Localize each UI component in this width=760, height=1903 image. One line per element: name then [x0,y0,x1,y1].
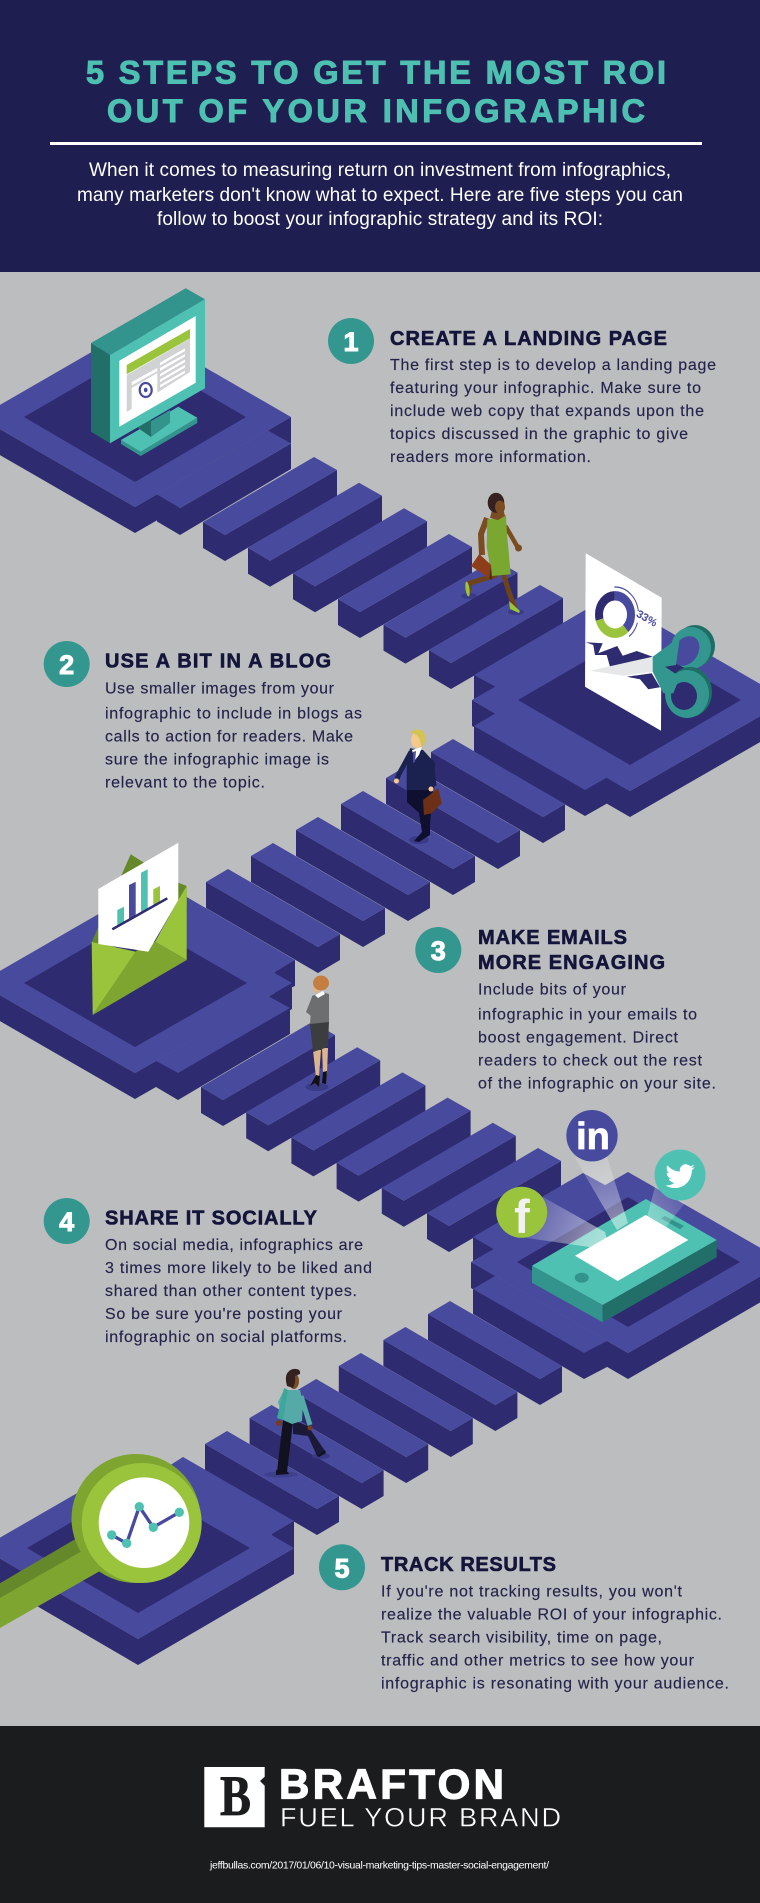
platform 5 [0,1457,294,1665]
icon: facebook [496,1187,547,1243]
body copy: sure the infographic image is [105,751,329,768]
number badge 3: 3 [431,936,446,966]
body copy [105,680,362,791]
step 3 text [415,927,716,1092]
body copy: infographic is resonating with your audience. [381,1675,729,1692]
number badge 2: 2 [59,650,74,680]
body copy: of the infographic on your site. [478,1075,716,1092]
body copy: The first step is to develop a landing page [390,357,716,374]
title: OUT OF YOUR INFOGRAPHIC [107,93,645,129]
stairs 4 [205,1301,562,1535]
intro text: When it comes to measuring return on investment from infographics, [89,160,671,181]
heading: make emails more engaging: MAKE EMAILS [478,927,627,949]
logo: wordmark: BRAFTON [279,1760,504,1808]
platform 1 [0,327,291,535]
body copy: infographic on social platforms. [105,1329,347,1346]
heading: track results: TRACK RESULTS [381,1554,556,1576]
body copy: featuring your infographic. Make sure to [390,380,701,397]
icon: desktop monitor [91,288,205,456]
stairs 3 [201,1022,561,1252]
body copy: On social media, infographics are [105,1237,363,1254]
body copy: boost engagement. Direct [478,1029,679,1046]
heading: use a bit in a blog: USE A BIT IN A BLOG [105,650,331,672]
body copy: realize the valuable ROI of your infographic. [381,1606,722,1623]
title [86,54,666,129]
figure: man in teal sweater [264,1369,330,1478]
body copy: So be sure you're posting your [105,1306,343,1323]
icon: linkedin: in [576,1116,610,1158]
icon: magnifying glass with line chart [0,1454,202,1628]
body copy: readers more information. [390,449,591,466]
body copy: If you're not tracking results, you won't [381,1583,683,1600]
body copy: include web copy that expands upon the [390,403,704,420]
step 1 text [328,318,716,466]
source url: jeffbullas.com/2017/01/06/10-visual-marketing-tips-master-social-engagement/ [209,1859,549,1871]
title: 5 STEPS TO GET THE MOST ROI [86,54,666,90]
number badge 4 [44,1198,90,1244]
number badge 5 [319,1544,365,1590]
heading: share it socially: SHARE IT SOCIALLY [105,1208,318,1230]
body copy: relevant to the topic. [105,774,265,791]
figure: woman in green dress [461,493,524,615]
heading: create a landing page: CREATE A LANDING PAGE [390,328,667,350]
number badge 1 [328,318,374,364]
phone [532,1199,717,1322]
tagline: FUEL YOUR BRAND [280,1803,561,1833]
icon: twitter [654,1150,706,1200]
body copy [478,981,716,1092]
platform 2 [472,609,760,817]
number badge 5: 5 [334,1553,350,1583]
icon: facebook: f [514,1190,530,1243]
number badge 2 [44,641,90,687]
icon: paper with donut chart and scissors: 33% [634,608,659,630]
heading: make emails more engaging: MORE ENGAGING [478,952,665,974]
body copy [381,1583,729,1692]
figure: woman in grey suit [306,976,329,1091]
heading: make emails more engaging [478,927,665,974]
body copy: Use smaller images from your [105,680,335,697]
body copy: calls to action for readers. Make [105,728,353,745]
body copy: shared than other content types. [105,1283,357,1300]
number badge 1: 1 [343,327,359,357]
body copy: topics discussed in the graphic to give [390,426,688,443]
icon: linkedin [566,1110,618,1161]
intro text: follow to boost your infographic strategy and its ROI: [157,209,603,230]
step 2 text [44,641,362,791]
body copy: Include bits of your [478,981,627,998]
body copy: traffic and other metrics to see how your [381,1652,695,1669]
platform 4 [471,1172,760,1379]
body copy: readers to check out the rest [478,1052,703,1069]
icon: phone with social media icons [496,1110,717,1322]
logo: brafton mark [204,1765,265,1828]
header panel [0,0,760,272]
stairs 1 [203,457,563,689]
body copy: 3 times more likely to be liked and [105,1260,372,1277]
step 5 text [319,1544,729,1692]
number badge 4: 4 [59,1207,74,1237]
logo: brafton mark: B [220,1765,251,1828]
platform 3 [0,880,295,1100]
icon: envelope with bar chart [92,843,187,1015]
body copy: infographic to include in blogs as [105,705,362,722]
number badge 3 [415,927,461,973]
footer panel [0,1726,760,1903]
body copy [105,1237,372,1346]
body copy: Track search visibility, time on page, [381,1629,662,1646]
donut chart [592,587,638,642]
icon: paper with donut chart and scissors [585,553,715,731]
body copy [390,357,716,466]
step 4 text [44,1198,372,1346]
intro text: many marketers don't know what to expect. Here are five steps you can [77,185,683,206]
body copy: infographic in your emails to [478,1006,697,1023]
stairs 2 [206,739,565,973]
intro text [77,160,683,230]
figure: businessman with briefcase [394,729,442,844]
